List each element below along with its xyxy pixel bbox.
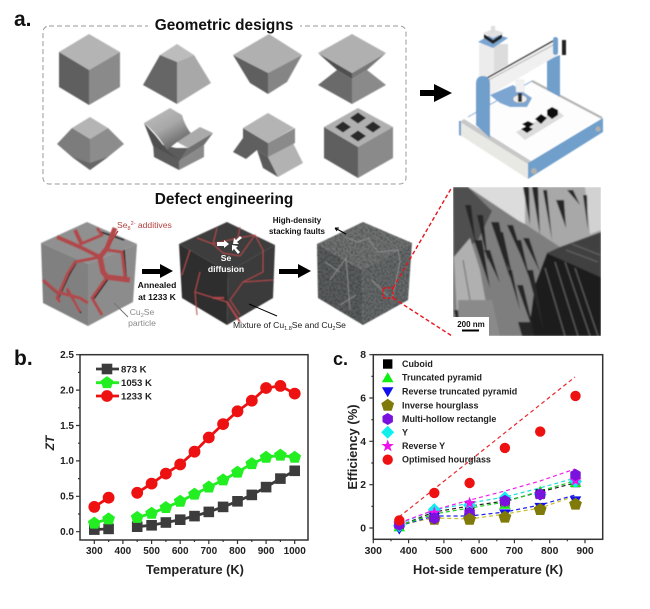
x tick labels: 900 bbox=[258, 546, 275, 557]
axes bbox=[369, 355, 603, 543]
x tick labels: 700 bbox=[200, 546, 218, 557]
x tick labels: 600 bbox=[172, 546, 189, 557]
label: additives: 2- bbox=[131, 221, 136, 227]
x tick labels: 500 bbox=[143, 546, 160, 557]
y tick labels: 0 bbox=[360, 524, 366, 534]
inverse pyramid bbox=[233, 34, 302, 94]
series: inverse hourglass bbox=[463, 498, 582, 525]
label: particle line 2: particle bbox=[128, 318, 156, 328]
y tick labels bbox=[60, 350, 74, 538]
label: stacking faults line 2: stacking faults bbox=[269, 227, 326, 236]
legend: Y bbox=[402, 427, 408, 437]
label: annealed: Annealed bbox=[138, 280, 176, 290]
series: reverse truncated pyramid bbox=[394, 496, 581, 535]
micrograph bbox=[453, 187, 601, 336]
y tick labels: 2 bbox=[360, 480, 366, 491]
panel b label: b. bbox=[14, 347, 33, 370]
panel: geometric designs bbox=[43, 17, 406, 184]
arrow to printer bbox=[420, 84, 452, 102]
dashed fits bbox=[399, 377, 575, 526]
arrow: to stacking faults bbox=[279, 264, 311, 278]
series: reverse Y bbox=[393, 474, 582, 529]
x tick labels bbox=[86, 546, 306, 557]
carriage bbox=[490, 85, 532, 107]
x tick labels: 800 bbox=[229, 546, 246, 557]
series: Y bbox=[393, 475, 582, 532]
chart: efficiency versus hot-side temperature bbox=[345, 350, 603, 577]
y tick labels: 1.0 bbox=[60, 456, 74, 467]
label: diffusion: diffusion bbox=[208, 264, 244, 274]
x tick labels: 600 bbox=[470, 546, 488, 557]
legend: 1053 K bbox=[121, 378, 152, 389]
series: truncated pyramid bbox=[394, 477, 581, 531]
y tick labels: 1.5 bbox=[60, 421, 74, 432]
rear leg bbox=[547, 55, 560, 97]
scale bar box bbox=[453, 317, 489, 336]
front leg bbox=[476, 76, 490, 138]
x axis title: Hot-side temperature (K) bbox=[413, 562, 563, 577]
arrow: anneal bbox=[142, 264, 173, 278]
legend: 873 K bbox=[121, 364, 147, 376]
y tick labels: 8 bbox=[360, 350, 366, 361]
heading: geometric designs: Geometric designs bbox=[155, 17, 293, 34]
y tick labels: 4 bbox=[360, 437, 366, 448]
label: mixture: Se bbox=[335, 320, 346, 330]
beam bbox=[485, 38, 558, 95]
icon: diffusion arrows bbox=[217, 236, 242, 254]
y tick labels: 6 bbox=[360, 394, 366, 404]
y tick labels bbox=[360, 350, 366, 534]
heading: defect engineering: Defect engineering bbox=[155, 191, 293, 208]
scale label: 200 nm bbox=[457, 320, 485, 329]
cube with additives bbox=[41, 222, 137, 326]
panel: defect engineering bbox=[41, 187, 452, 336]
pointer: additives bbox=[108, 231, 118, 246]
label: additives: Se bbox=[117, 220, 128, 230]
truncated pyramid bbox=[143, 44, 211, 104]
legend: Inverse hourglass bbox=[402, 400, 479, 410]
label: mixture: 1.8 bbox=[284, 326, 292, 332]
annealed cube bbox=[179, 222, 275, 325]
label: mixture: Se and Cu bbox=[292, 320, 333, 330]
label: stacking faults: High-density bbox=[273, 216, 322, 225]
pointer: stacking faults bbox=[335, 228, 346, 234]
legend: Cuboid bbox=[402, 359, 433, 369]
Y shape bbox=[144, 108, 213, 170]
x tick labels bbox=[365, 546, 594, 557]
zoom box bbox=[383, 288, 393, 298]
multi-hollow rectangle bbox=[324, 108, 393, 178]
legend: Reverse Y bbox=[402, 441, 445, 451]
label: particle: Se bbox=[144, 307, 155, 317]
y tick labels: 0.5 bbox=[60, 492, 74, 503]
panel c label: c. bbox=[333, 349, 348, 369]
x tick labels: 300 bbox=[86, 546, 103, 557]
label: particle: 2 bbox=[141, 313, 144, 319]
series: 1233 K bbox=[88, 380, 301, 513]
legend bbox=[381, 359, 517, 465]
x tick labels: 900 bbox=[576, 546, 594, 557]
label: additives: 8 bbox=[128, 226, 131, 232]
panel a label: a. bbox=[14, 8, 32, 31]
double-taper shape bbox=[57, 117, 124, 170]
series: 1053 K bbox=[88, 449, 301, 529]
label: Se diffusion: Se bbox=[221, 253, 231, 263]
icon: 3D printer bbox=[459, 26, 603, 179]
series: 873 K bbox=[89, 466, 300, 535]
label: temperature: at 1233 K bbox=[138, 292, 177, 302]
y axis title: ZT bbox=[43, 434, 57, 451]
x tick labels: 800 bbox=[541, 546, 559, 557]
shapes bbox=[57, 34, 393, 178]
x tick labels: 400 bbox=[400, 546, 417, 557]
label: mixture: 2 bbox=[332, 326, 335, 332]
axes bbox=[76, 355, 308, 544]
legend: Optimised hourglass bbox=[402, 455, 491, 465]
tower bbox=[479, 44, 494, 77]
pointer: particle bbox=[114, 303, 128, 317]
zoom lines bbox=[393, 187, 452, 336]
x tick labels: 1000 bbox=[284, 546, 306, 557]
series: optimised hourglass bbox=[394, 391, 581, 526]
label: additives: additives bbox=[135, 220, 172, 230]
chart: ZT versus temperature bbox=[43, 350, 308, 577]
y tick labels: 2.5 bbox=[60, 350, 74, 361]
cuboid bbox=[59, 34, 120, 105]
legend: Truncated pyramid bbox=[402, 373, 482, 383]
series: multi-hollow rectangle bbox=[394, 469, 581, 531]
print bed bbox=[468, 82, 600, 162]
x tick labels: 300 bbox=[365, 546, 382, 557]
x tick labels: 700 bbox=[506, 546, 523, 557]
y tick labels: 2.0 bbox=[60, 385, 74, 396]
series: inverse hourglass, low temperature points bbox=[428, 513, 441, 525]
legend: Reverse truncated pyramid bbox=[402, 387, 517, 397]
x tick labels: 400 bbox=[115, 546, 132, 557]
x axis title: Temperature (K) bbox=[146, 562, 244, 577]
pointer: mixture bbox=[249, 304, 277, 316]
legend bbox=[96, 364, 152, 402]
sample holder with samples bbox=[516, 110, 564, 140]
y tick labels: 0.0 bbox=[60, 527, 74, 538]
hourglass bbox=[318, 34, 386, 104]
series: cuboid bbox=[395, 478, 580, 530]
dashed frame bbox=[43, 26, 406, 184]
final cube bbox=[317, 222, 412, 325]
x tick labels: 500 bbox=[435, 546, 453, 557]
reverse Y shape bbox=[233, 113, 303, 177]
legend: Multi-hollow rectangle bbox=[402, 414, 496, 424]
scale bar bbox=[462, 330, 479, 332]
label: particle: Cu bbox=[130, 307, 141, 317]
label: mixture: Mixture of Cu bbox=[233, 320, 284, 330]
y axis title: Efficiency (%) bbox=[345, 404, 360, 490]
legend: 1233 K bbox=[121, 392, 152, 402]
